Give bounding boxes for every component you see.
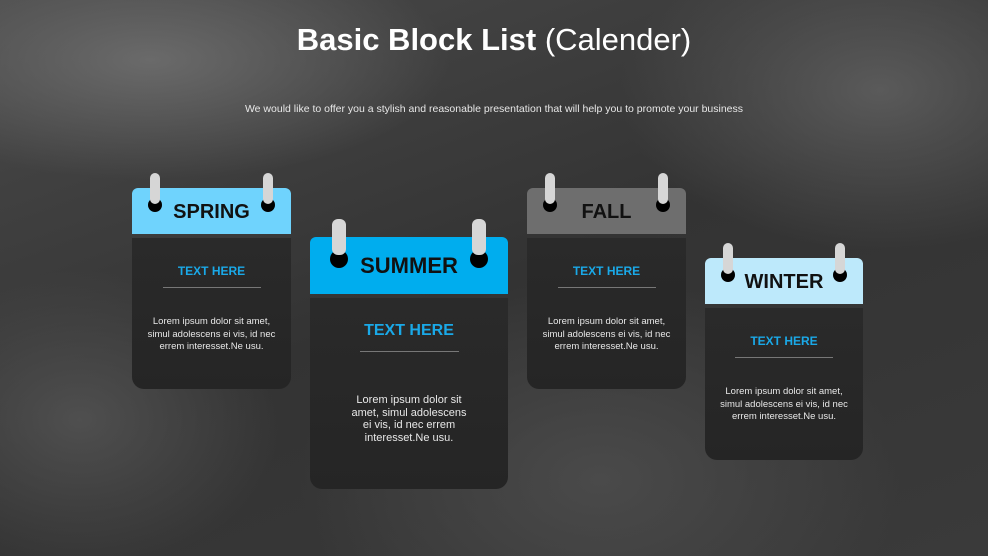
body: summer: TEXT HERE [364,322,454,339]
body: summer: Lorem ipsum dolor sit amet, simul adolescens ei vis, id nec errem interesset.Ne usu. [352,394,466,444]
card: fall [527,173,686,389]
title: Basic Block List (Calender) [297,22,691,57]
header: summer [310,237,508,294]
body: fall [527,238,686,389]
body: summer [310,298,508,489]
header: winter: WINTER [745,271,823,293]
header: fall [527,188,686,234]
card: summer [310,219,508,489]
header: winter [705,258,863,304]
body: winter [705,308,863,460]
header: fall: FALL [582,201,632,223]
body: fall: Lorem ipsum dolor sit amet, simul adolescens ei vis, id nec errem interesset.Ne usu. [543,316,670,352]
body: winter: Lorem ipsum dolor sit amet, simul adolescens ei vis, id nec errem interesset.Ne usu. [720,386,848,422]
body: spring: Lorem ipsum dolor sit amet, simul adolescens ei vis, id nec errem interesset.Ne usu. [148,316,275,352]
header: summer: SUMMER [360,253,458,278]
subtitle: We would like to offer you a stylish and reasonable presentation that will help you to promote your business [245,103,743,115]
card: winter [705,243,863,460]
body: spring [132,238,291,389]
card: spring [132,173,291,389]
body: spring: TEXT HERE [178,264,245,278]
body: fall: TEXT HERE [573,264,640,278]
body: winter: TEXT HERE [750,334,818,348]
header: spring [132,188,291,234]
header: spring: SPRING [173,201,250,223]
